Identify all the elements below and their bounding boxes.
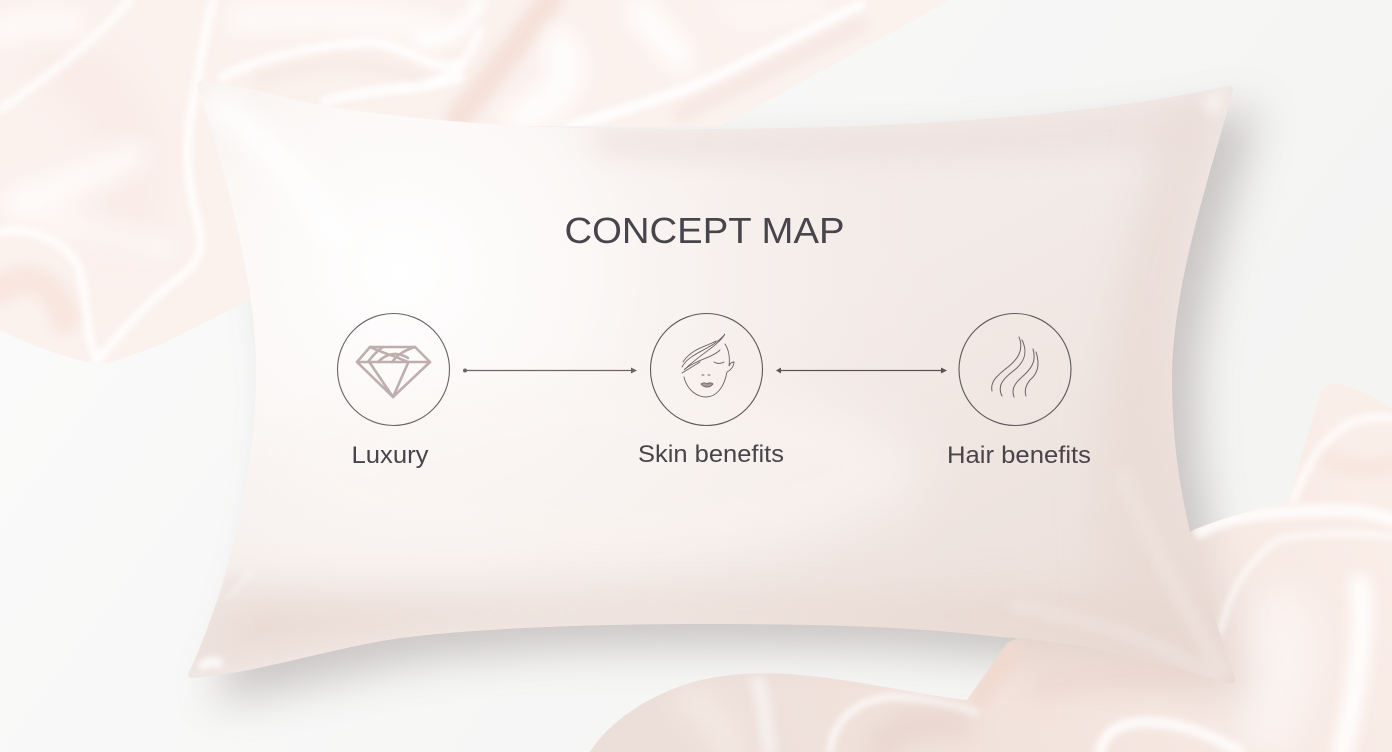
icon: diamond bbox=[357, 347, 430, 397]
label: luxury: Luxury bbox=[352, 442, 428, 469]
icon: hair waves bbox=[992, 337, 1038, 397]
label: hair benefits: Hair benefits bbox=[947, 442, 1091, 469]
node: luxury bbox=[338, 314, 450, 469]
fabric: bottom-right silk drape bbox=[590, 384, 1392, 752]
concept map diagram bbox=[338, 314, 1091, 469]
node circle: luxury bbox=[338, 314, 450, 426]
arrow: luxury to skin bbox=[463, 368, 637, 374]
fabric: top-left silk drape bbox=[0, 0, 960, 380]
title: CONCEPT MAP bbox=[564, 210, 844, 251]
pillow cast shadow on surface bbox=[212, 103, 1259, 705]
node circle: skin bbox=[650, 314, 762, 426]
node: skin benefits bbox=[638, 314, 784, 468]
label: skin benefits: Skin benefits bbox=[638, 441, 784, 468]
panel: satin pillow bbox=[180, 70, 1250, 690]
node circle: hair bbox=[959, 314, 1071, 426]
arrow: skin to hair bbox=[776, 368, 947, 374]
node: hair benefits bbox=[947, 314, 1091, 469]
icon: face bbox=[682, 334, 734, 397]
